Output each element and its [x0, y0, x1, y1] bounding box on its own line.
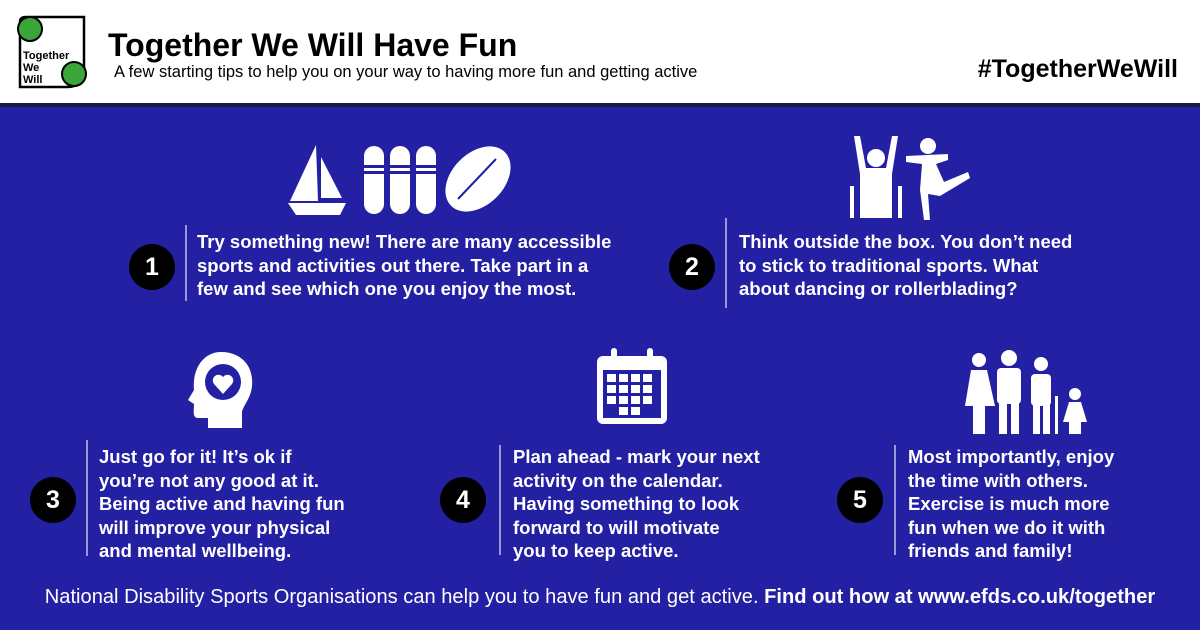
- tip 4: activity on the calendar.: [513, 470, 723, 490]
- subtitle: A few starting tips to help you on your way to having more fun and getting active: [114, 63, 697, 81]
- icon: wheelchair and dancer: [850, 136, 970, 220]
- tip 2: about dancing or rollerblading?: [739, 278, 1018, 299]
- tip 4: forward to will motivate: [513, 516, 720, 538]
- tip 5: Exercise is much more: [908, 493, 1110, 514]
- tip 5: fun when we do it with: [908, 516, 1105, 538]
- tip 3: Just go for it! It’s ok if: [99, 446, 292, 467]
- tip 1: sports and activities out there. Take part in a: [197, 254, 588, 276]
- tip 5: the time with others.: [908, 470, 1088, 490]
- tip 4: Plan ahead - mark your next: [513, 446, 760, 467]
- logo: [17, 16, 87, 88]
- tip 4: [440, 445, 760, 561]
- footer: National Disability Sports Organisations can help you to have fun and get active. Find out how at www.efds.co.uk/together: [45, 586, 1155, 608]
- icon: sports: [288, 145, 511, 215]
- header: [0, 0, 1200, 107]
- icon: head with heart: [188, 352, 252, 428]
- tip 5: Most importantly, enjoy: [908, 446, 1114, 467]
- tip 2: 2: [685, 253, 699, 281]
- tip 1: Try something new! There are many accessible: [197, 231, 611, 252]
- tip 3: you’re not any good at it.: [99, 470, 319, 490]
- title: Together We Will Have Fun: [108, 27, 517, 63]
- tip 4: Having something to look: [513, 493, 739, 514]
- tip 2: to stick to traditional sports. What: [739, 254, 1038, 276]
- tip 3: Being active and having fun: [99, 493, 345, 514]
- tip 1: [129, 225, 611, 301]
- tip 1: 1: [145, 253, 159, 281]
- tip 4: 4: [456, 486, 470, 514]
- tip 3: 3: [46, 486, 60, 514]
- hashtag: #TogetherWeWill: [978, 55, 1178, 83]
- tip 5: [837, 445, 1114, 561]
- tip 5: 5: [853, 486, 867, 514]
- tip 3: [30, 440, 345, 561]
- logo: Together: [23, 50, 70, 62]
- tip 2: [669, 218, 1072, 308]
- tip 4: you to keep active.: [513, 540, 679, 561]
- tip 5: friends and family!: [908, 540, 1072, 561]
- tip 2: Think outside the box. You don’t need: [739, 231, 1072, 252]
- logo: Will: [23, 74, 42, 86]
- tip 3: and mental wellbeing.: [99, 540, 291, 561]
- tip 1: few and see which one you enjoy the most.: [197, 278, 576, 299]
- icon: calendar: [597, 348, 667, 424]
- tip 3: will improve your physical: [99, 516, 330, 538]
- icon: family: [965, 350, 1087, 434]
- logo: We: [23, 62, 39, 74]
